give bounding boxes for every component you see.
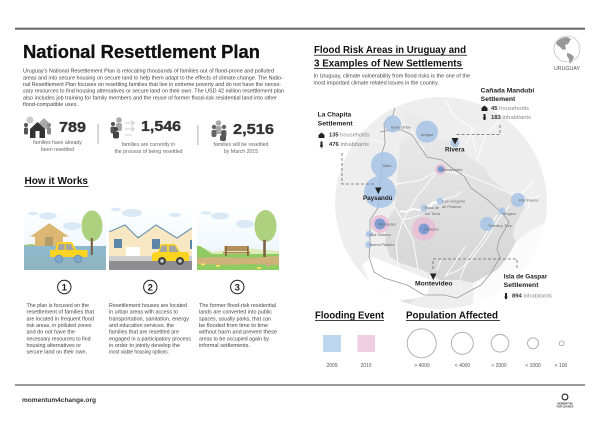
town labels: Paso de: [425, 205, 439, 210]
roads: [370, 100, 540, 290]
map base disc: [330, 97, 560, 310]
step number 3: 3: [235, 282, 240, 294]
callout: La Chapita settlement: La Chapita: [318, 112, 352, 119]
legend: population affected: < 2000: [491, 363, 507, 369]
legend: population affected: < 1000: [525, 363, 541, 369]
callout: La Chapita settlement: Settlement: [318, 121, 354, 128]
stat: 789 families resettled: [24, 116, 86, 153]
step 2 text: engaged in a participatory process: [109, 336, 192, 342]
town labels: Bella Unión: [391, 124, 411, 130]
step 2 text: Resettlement houses are located: [109, 303, 187, 309]
icon: houses and family: [24, 116, 51, 138]
step number 1: 1: [62, 282, 68, 294]
legend: flooding event: 2010: [360, 363, 372, 369]
step 1 text: risk areas, in polluted zones: [26, 323, 92, 329]
town labels: Mercedes: [379, 222, 396, 226]
step number 2: 2: [148, 282, 153, 294]
step 2 text: families that are resettled are: [109, 330, 179, 336]
callout: Isla de Gaspar settlement: Isla de Gaspar: [504, 273, 548, 280]
callout: Isla de Gaspar settlement: 894 inhabitants: [512, 294, 552, 300]
illustration: park with bench: [197, 207, 279, 270]
town labels: Durazno: [424, 226, 439, 232]
icon: globe with Uruguay label: URUGUAY: [554, 66, 580, 72]
step number 1: [58, 280, 71, 294]
stat: 789 families resettled: 789: [59, 119, 86, 136]
callout: La Chapita settlement: [318, 112, 370, 148]
icon: family: [212, 120, 226, 141]
town labels: Artigas: [421, 132, 433, 137]
legend: flooding event: Flooding Event: [315, 310, 385, 321]
town labels: Nueva Palmira: [369, 242, 395, 247]
step 1 text: necessary resources to find: [26, 336, 91, 342]
step 2 text: [109, 303, 192, 356]
marker: Montevideo: Montevideo: [415, 280, 453, 288]
step 1 text: secure land on their own.: [26, 350, 87, 356]
logo: Momentum for Change: MOMENTUM: [558, 402, 572, 405]
step number 3: [231, 280, 244, 294]
step 3 text: [199, 303, 277, 349]
map intro text: In Uruguay, climate vulnerability from flood risks is the one of the: [314, 74, 470, 80]
intro text block: Uruguay's National Resettlement Plan is relocating thousands of families out of flood-prone and polluted: [23, 69, 274, 75]
step 3 text: areas to be occupied again by: [199, 336, 270, 342]
marker: Rivera: Rivera: [445, 147, 465, 154]
callout: Cañada Mandubí settlement: 45 households: [491, 106, 529, 112]
town labels: Tacuarembó: [441, 167, 462, 172]
heading: flood risk areas: [314, 45, 467, 69]
legend: population affected: < 100: [555, 363, 568, 369]
stat: 789 families resettled: families have already: [33, 140, 82, 146]
step 3 text: without harm and prevent these: [199, 330, 277, 336]
town labels: Treinta y Tres: [488, 223, 512, 228]
marker: Montevideo: [415, 274, 453, 288]
step 1 text: The plan is focused on the: [26, 303, 89, 309]
intro text block: nal Resettlement Plan focuses on resettling families that live in extreme poverty and do not have the neces-: [23, 82, 281, 88]
logo: Momentum for Change: [557, 394, 574, 408]
step 1 text: housing alternatives or: [26, 343, 81, 349]
intro text block: also includes job training for family members and the reuse of former flood-risk residential land into other: [23, 95, 277, 101]
step 2 text: most viable housing options.: [109, 350, 169, 356]
stat: 1,546 families in process: families are currently in: [122, 142, 175, 148]
border: [369, 107, 509, 298]
legend: population affected: Population Affected: [406, 310, 498, 321]
step 3 text: be flooded from time to time: [199, 323, 268, 329]
heading: flood risk areas: Flood Risk Areas in Uruguay and: [314, 45, 466, 56]
legend: population affected: < 4000: [455, 363, 470, 369]
marker: Paysandú: [363, 188, 393, 202]
step 3 text: spaces, usually parks, that can: [199, 316, 271, 322]
dashed connector: Cañada Mandubí: [455, 125, 500, 134]
map of Uruguay: [330, 97, 560, 310]
town labels: Salto: [383, 163, 391, 168]
step 1 text: resettlement of families that: [26, 310, 95, 316]
step number 2: [144, 280, 157, 294]
intro text block: sary resources to find housing alternatives or secure land on their own. The USD 42 million resettlement plan: [23, 89, 284, 95]
legend: population affected: [406, 310, 568, 369]
dashed connector: La Chapita: [342, 153, 376, 184]
intro text block: [23, 69, 284, 108]
step 2 text: and education services. the: [109, 323, 174, 329]
legend: population affected: > 4000: [414, 363, 430, 369]
callout: Isla de Gaspar settlement: Settlement: [504, 282, 539, 289]
stat: 789 families resettled: been resettled: [41, 147, 74, 153]
intro text block: flood-compatible uses.: [23, 102, 78, 108]
step 2 text: in urban areas with access to: [109, 310, 178, 316]
callout: Cañada Mandubí settlement: Settlement: [481, 96, 516, 103]
step 3 text: The former flood-risk residential: [199, 303, 276, 309]
heading: How it Works: How it Works: [24, 176, 88, 187]
town labels: [369, 124, 538, 247]
legend: flooding event: 2009: [326, 363, 338, 369]
dashed connector: Isla de Gaspar: [433, 259, 517, 270]
step 2 text: transportation, sanitation, energy: [109, 316, 190, 322]
heading: flood risk areas: 3 Examples of New Settlements: [314, 58, 462, 69]
town labels: los Toros: [425, 211, 441, 216]
step 1 text: are located in frequent flood: [26, 316, 94, 322]
illustration: flooded house: [24, 207, 106, 270]
callout: Cañada Mandubí settlement: Cañada Mandubí: [481, 88, 534, 95]
step 3 text: lands are converted into public: [199, 310, 273, 316]
stat: 2,516 families by March 2015: by March 2015: [224, 149, 258, 155]
intro text block: areas and into secure housing on secure land to help them adapt to the effects of climate change. The Natio-: [23, 75, 283, 81]
logo: Momentum for Change: FOR CHANGE: [557, 406, 574, 408]
illustration: resettlement houses: [109, 207, 192, 270]
town labels: Villa Soriano: [369, 232, 391, 237]
stat: 2,516 families by March 2015: 2,516: [233, 121, 274, 138]
town labels: Río Branco: [519, 198, 538, 202]
callout: Cañada Mandubí settlement: [481, 88, 534, 121]
stat: 2,516 families by March 2015: [212, 120, 274, 155]
icon: globe with Uruguay label: [554, 36, 580, 72]
marker: Rivera: [445, 138, 465, 154]
title: National Resettlement Plan: [23, 41, 260, 62]
stat: 1,546 families in process: 1,546: [141, 118, 181, 135]
callout: La Chapita settlement: 476 inhabitants: [329, 142, 369, 148]
step 3 text: informal settlements.: [199, 343, 250, 349]
town labels: de Polanco: [442, 204, 461, 209]
flood circles: [364, 116, 525, 248]
stat: 1,546 families in process: the process of being resettled: [114, 149, 183, 155]
legend: flooding event: [315, 310, 385, 369]
callout: Isla de Gaspar settlement: [504, 273, 552, 300]
marker: Paysandú: Paysandú: [363, 195, 393, 202]
step 2 text: in order to jointly develop the: [109, 343, 180, 349]
footer url: momentum4change.org: [22, 397, 96, 404]
stat: 2,516 families by March 2015: families will be resettled: [214, 142, 269, 148]
callout: La Chapita settlement: 135 households: [329, 133, 370, 139]
icon: family moving: [110, 117, 134, 138]
map intro text: [314, 74, 470, 86]
callout: Cañada Mandubí settlement: 183 inhabitants: [491, 115, 531, 121]
town labels: San Gregorio: [442, 198, 465, 204]
step 1 text: and do not have the: [26, 330, 75, 336]
step 1 text: [26, 303, 95, 356]
map intro text: most important climate related issues in the country.: [314, 80, 439, 86]
town labels: Vergara: [502, 211, 516, 216]
stat: 1,546 families in process: [110, 117, 183, 155]
